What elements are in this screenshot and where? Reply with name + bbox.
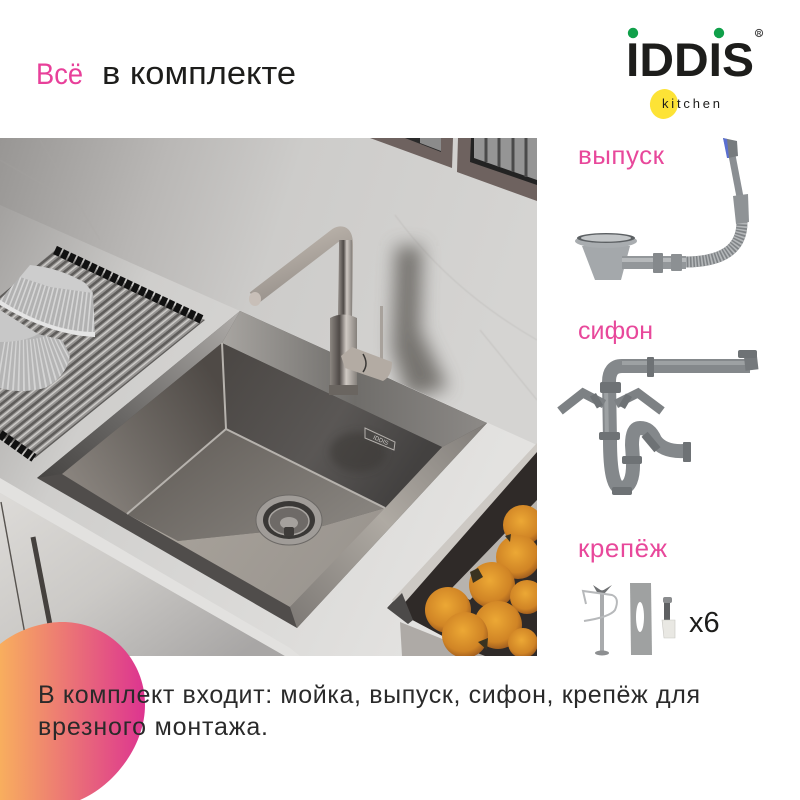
tray with persimmons — [387, 443, 544, 658]
description text: В комплект входит: мойка, выпуск, сифон, крепёж для — [38, 681, 700, 709]
drying rack — [0, 250, 205, 458]
decorative gradient blob — [0, 622, 145, 800]
overflow plate: IDDIS — [372, 435, 389, 447]
label: выпуск: выпуск — [578, 140, 665, 170]
logo: IDDIS kitchen: R — [757, 32, 762, 38]
overflow plate — [330, 428, 395, 472]
faucet — [249, 233, 392, 395]
lower bowl — [0, 310, 70, 391]
sink bowl — [62, 343, 442, 607]
panel: крепёж — [578, 533, 720, 656]
quantity: x6: x6 — [689, 607, 720, 639]
photo: kitchen sink — [0, 138, 544, 658]
faucet shadow on wall — [392, 246, 448, 398]
icon: clamp — [583, 585, 617, 656]
sink rim — [37, 311, 487, 628]
logo: IDDIS kitchen: kitchen — [662, 96, 720, 111]
countertop edge — [0, 478, 300, 656]
wall veins — [396, 216, 536, 400]
upper shelf with glasses — [370, 138, 537, 201]
logo: IDDIS kitchen — [626, 28, 763, 122]
cabinet front — [0, 493, 285, 656]
cabinet panel lines — [1, 502, 51, 640]
icon: drain assembly — [575, 138, 749, 280]
title — [36, 55, 296, 91]
icon: mounting plate — [630, 583, 652, 655]
label: крепёж: крепёж — [578, 533, 668, 563]
panel: сифон — [560, 317, 757, 495]
marble wall — [0, 138, 537, 478]
title: в комплекте — [102, 55, 296, 91]
countertop — [0, 205, 537, 656]
icon: siphon assembly — [560, 350, 757, 495]
icon: screw with anchor — [662, 597, 675, 638]
title: Всё — [36, 58, 83, 91]
panel: выпуск — [575, 138, 749, 280]
label: сифон: сифон — [578, 317, 653, 345]
upper bowl — [0, 265, 95, 337]
logo: IDDIS kitchen: IDDIS — [626, 33, 754, 86]
drain — [256, 495, 322, 545]
description text — [38, 681, 700, 741]
description text: врезного монтажа. — [38, 713, 268, 741]
